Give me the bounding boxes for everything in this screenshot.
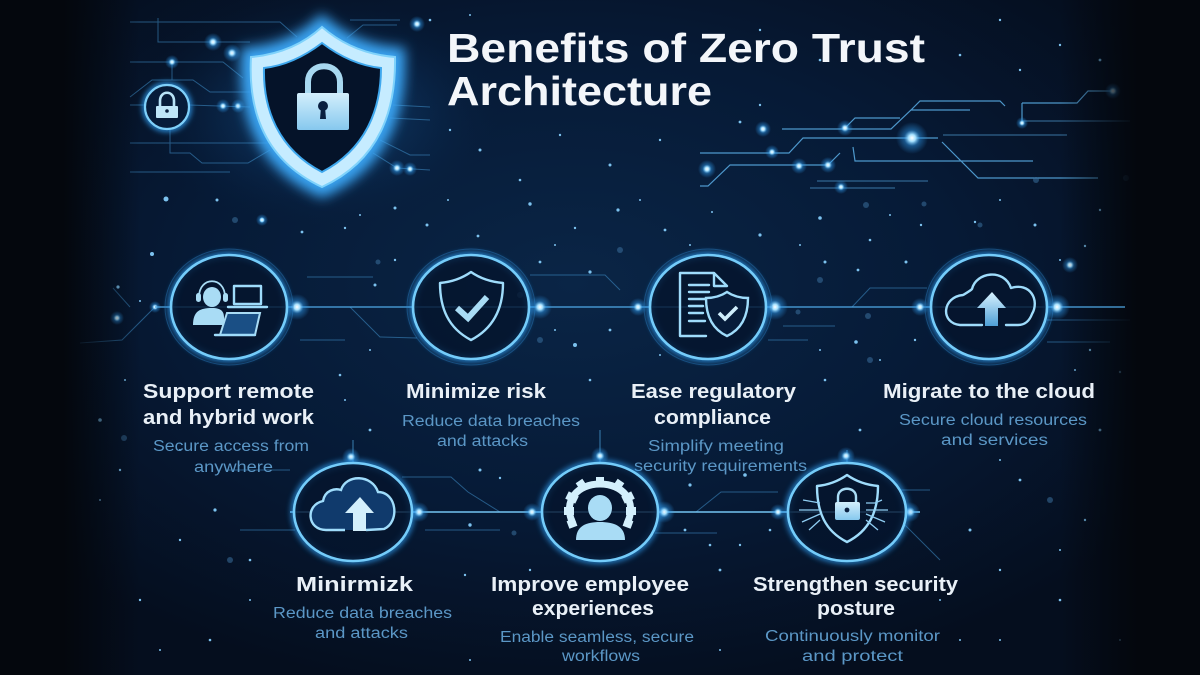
description: Secure cloud resources — [899, 412, 1087, 429]
icon: document with shield — [644, 249, 772, 365]
heading: Minirmizk — [296, 574, 414, 596]
panel: minirmizk — [273, 463, 452, 642]
icon: shield with check — [407, 249, 535, 365]
icon: person with gear — [542, 463, 658, 561]
heading: Improve employee — [491, 574, 689, 596]
panel: support remote and hybrid work — [143, 249, 315, 476]
description line 2: security requirements — [634, 458, 807, 475]
sparks — [896, 122, 928, 154]
description: Simplify meeting — [648, 438, 784, 455]
icon: main shield with padlock — [251, 27, 395, 187]
title — [447, 25, 925, 114]
icon: shield with padlock and circuits — [788, 463, 906, 561]
title: Architecture — [447, 68, 712, 114]
heading line 2: experiences — [532, 598, 654, 620]
description line 2: anywhere — [194, 459, 273, 476]
description: Reduce data breaches — [402, 413, 580, 430]
panel: ease regulatory compliance — [631, 249, 807, 475]
heading: Minimize risk — [406, 381, 547, 403]
heading line 2: compliance — [654, 407, 771, 429]
icon: small padlock node — [145, 85, 189, 129]
panel: minimize risk — [402, 249, 580, 450]
description line 2: and services — [941, 432, 1048, 449]
panel: strengthen security posture — [753, 463, 959, 665]
icon: main padlock — [297, 66, 349, 130]
heading line 2: posture — [817, 598, 895, 620]
icon: remote worker with laptops — [165, 249, 293, 365]
heading: Support remote — [143, 381, 314, 403]
description: Secure access from — [153, 438, 309, 455]
description line 2: and attacks — [315, 625, 408, 642]
icon: cloud with upload arrow — [925, 249, 1053, 365]
description: Enable seamless, secure — [500, 629, 694, 646]
connector lines between circles — [155, 294, 1125, 523]
heading: Migrate to the cloud — [883, 381, 1095, 403]
panel: improve employee experiences — [491, 463, 694, 665]
heading: Ease regulatory — [631, 381, 797, 403]
heading line 2: and hybrid work — [143, 407, 315, 429]
description line 2: and protect — [802, 648, 904, 665]
description: Reduce data breaches — [273, 605, 452, 622]
description: Continuously monitor — [765, 628, 940, 645]
circuit traces: left of shield — [130, 18, 430, 172]
circuit traces: right of title — [700, 91, 1130, 188]
panel: migrate to the cloud — [883, 249, 1095, 449]
circuit traces: mid bands — [80, 275, 1130, 560]
description line 2: workflows — [561, 648, 640, 665]
heading: Strengthen security — [753, 574, 959, 596]
icon: cloud with upload arrow — [294, 463, 412, 561]
title: Benefits of Zero Trust — [447, 25, 925, 71]
description line 2: and attacks — [437, 433, 528, 450]
